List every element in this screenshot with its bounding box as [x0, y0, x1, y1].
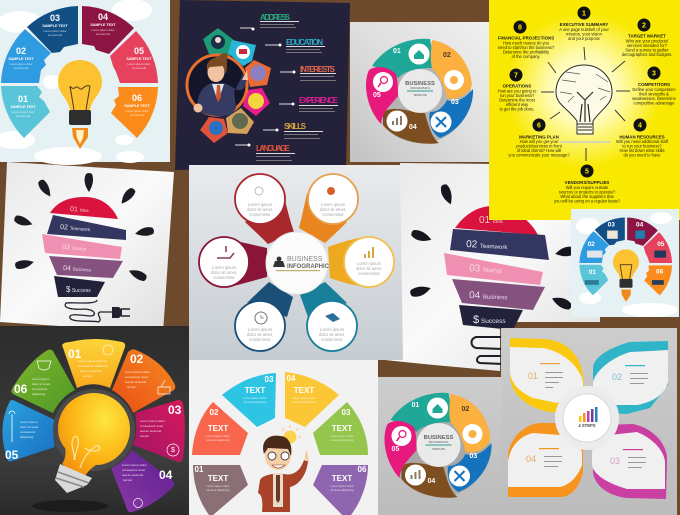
blue segment 03: 03: [470, 453, 477, 460]
petal 01: consectetur adipiscing: [78, 364, 108, 368]
petal 02: consectetur amet: [125, 375, 148, 379]
step 3 competitors: COMPETITORS: [638, 82, 670, 87]
teal segment 01: 01: [412, 402, 419, 409]
petal 04: Lorem ipsum dolor: [122, 463, 147, 467]
band 03 Startup: [444, 253, 543, 285]
panel: small bulb ring (right): [571, 209, 679, 317]
step 2 target market: Send a survey to gather: [625, 48, 669, 52]
petal 04: tempor: [123, 478, 132, 482]
panel: cartoon man ring: [189, 360, 378, 515]
band 03 Startup: 03 Startup: [469, 263, 503, 276]
petal 01: 01: [68, 347, 82, 361]
petal 02: Lorem ipsum dolor: [125, 370, 150, 374]
petal 1 red: [235, 174, 294, 244]
segment 01 mauve: Lorem ipsum dolor: [206, 484, 230, 488]
segment 04 yellow: [285, 372, 339, 427]
segment 01 mauve: sit amet adipiscing: [206, 488, 230, 492]
segment 05: sit amet elit: [132, 66, 146, 70]
label EDUCATION: EDUCATION: [286, 38, 323, 47]
band 01 Idea: [455, 206, 538, 235]
label ADDRESS: [240, 13, 299, 30]
step 8 financial projections: Determine the profitability: [503, 50, 550, 54]
glowing bulb: [53, 389, 135, 493]
segment 02 red: TEXT: [208, 424, 228, 433]
orange segment 02: 02: [462, 406, 469, 413]
petal 01: tempor: [83, 374, 92, 378]
panel: resume navy: [175, 0, 350, 170]
pentagon icons: [200, 28, 271, 143]
segment 03: 03: [50, 13, 60, 23]
petal 05: Lorem ipsum: [20, 420, 38, 424]
petal 01: Lorem ipsum dolor sit: [78, 359, 107, 363]
segment 02: SAMPLE TEXT: [8, 57, 34, 61]
segment 03 cyan: 03: [265, 375, 274, 384]
petal 03: 03: [168, 403, 182, 417]
step 4 human resources: [616, 118, 669, 158]
band Success: $ Success: [66, 285, 91, 294]
petal 5 navy: dolor sit amet,: [247, 332, 273, 337]
petal 04: 04: [159, 468, 173, 482]
panel: six petal flower: [189, 165, 403, 360]
step 5 vendors: What about the suppliers that: [560, 194, 614, 199]
segment 02: [1, 29, 51, 83]
step 4 human resources: 4: [638, 122, 642, 130]
petal 02: [112, 349, 175, 413]
panel: small bulb ring (right): 04: [636, 221, 644, 228]
segment 03 green: TEXT: [332, 424, 352, 433]
step 6 marketing plan: [508, 118, 570, 158]
panel: idea bulb ring (top left): [0, 0, 170, 165]
step 8 financial projections: 8: [518, 24, 522, 32]
petal 06: adipiscing: [32, 392, 46, 396]
panel: small bulb ring (right): 02: [588, 241, 595, 248]
segment 01: SAMPLE TEXT: [10, 105, 36, 109]
step 7 operations: to get the job done.: [499, 106, 535, 112]
pink segment 05: 05: [392, 446, 399, 453]
petal 6 maroon: Lorem ipsum: [212, 265, 236, 270]
segment 02 red: Lorem ipsum dolor: [206, 434, 230, 438]
band 03 Startup: [42, 234, 122, 259]
petal 01: sed do eiusmod: [80, 369, 102, 373]
panel: small bulb ring (right): 03: [608, 221, 615, 228]
band 01 Idea: 01 Idea: [479, 215, 503, 226]
segment 04 yellow: Lorem ipsum dolor: [292, 396, 316, 400]
band 03 Startup: 03 Startup: [62, 244, 87, 253]
petal 03: consectetur amet: [140, 424, 163, 428]
step 4 human resources: How list down what skills: [619, 148, 665, 153]
panel: yellow business plan: [489, 0, 680, 220]
segment 01 mauve: TEXT: [208, 474, 228, 483]
segment 03 cyan: Lorem ipsum dolor: [243, 396, 267, 400]
petal 2 orange: dolor sit amet,: [320, 207, 346, 212]
segment 03: Lorem ipsum dolor: [43, 29, 67, 33]
panel: four steps leaves: [501, 328, 677, 515]
icon: light bulb with flame: [58, 60, 102, 149]
segment 01 mauve: [193, 465, 248, 515]
petal 06: [11, 350, 75, 413]
segment 06: [111, 87, 158, 138]
step 8 financial projections: How much money do you: [503, 40, 549, 46]
segment 06: SAMPLE TEXT: [124, 104, 150, 108]
step 3 competitors: their strengths &: [639, 92, 669, 96]
petal 1 red: consectetur: [249, 212, 271, 217]
petal 5 navy: consectetur: [249, 337, 271, 342]
label LANGUAGE: [235, 144, 295, 161]
step 2 target market: [622, 18, 672, 57]
step 6 marketing plan: you communicate your message?: [508, 152, 570, 158]
step 1 executive summary: and your purpose: [568, 36, 601, 41]
step 4 human resources: to run your business?: [622, 144, 662, 148]
centre disc: [398, 69, 442, 113]
petal 05: [2, 400, 55, 462]
centre disc: TEMPLATE: [432, 447, 446, 451]
centre disc: INFOGRAPHIC: [287, 264, 330, 270]
segment 02: sit amet elit: [14, 66, 28, 70]
step 1 executive summary: [559, 6, 609, 41]
petal 05: consectetur: [20, 430, 36, 434]
petal 06: Lorem ipsum: [32, 377, 50, 381]
band 01 Idea: 01 Idea: [70, 206, 89, 214]
petal 6 maroon: dolor sit amet,: [211, 270, 237, 275]
step 7 operations: OPERATIONS: [503, 84, 531, 88]
step 5 vendors: 5: [585, 168, 589, 176]
label SKILLS: SKILLS: [284, 122, 307, 131]
leaf 03 magenta: [592, 424, 667, 499]
petal 05: dolor sit amet: [20, 425, 38, 429]
panel: small bulb ring (right): 01: [589, 269, 596, 276]
step 1 executive summary: mission, your vision: [566, 32, 603, 36]
cord: [472, 337, 503, 364]
petal 3 yellow: Lorem ipsum: [357, 261, 381, 266]
segment 02: 02: [16, 46, 26, 56]
segment 06 purple: TEXT: [332, 474, 352, 483]
petal 06: dolor sit amet: [32, 382, 50, 386]
petal 02: tempor: [127, 385, 136, 389]
step 3 competitors: weaknesses. Determine: [632, 96, 677, 101]
step 5 vendors: you will be using on a regular basis?: [554, 198, 621, 204]
segment 06 purple: [313, 465, 368, 515]
petal 04: consectetur amet: [122, 468, 145, 472]
segment 03: [27, 6, 78, 53]
step 5 vendors: [554, 164, 621, 204]
rays: [13, 173, 155, 282]
segment 06: sit amet elit: [130, 113, 144, 117]
segment 05: 05: [134, 46, 144, 56]
segment 02 red: 02: [210, 408, 219, 417]
band 04 Business: [49, 256, 123, 278]
petal 3 yellow: dolor sit amet,: [356, 266, 382, 271]
panel: business pie (top): [350, 22, 489, 162]
segment 03 cyan: TEXT: [245, 386, 265, 395]
segment 04: SAMPLE TEXT: [90, 23, 116, 27]
petal 2 orange: [299, 174, 358, 243]
cartoon man with idea bulb: [258, 425, 309, 512]
step 2 target market: demographics and budgets.: [622, 52, 672, 57]
step 8 financial projections: FINANCIAL PROJECTIONS: [498, 36, 554, 40]
step 6 marketing plan: of ideal clients? How will: [517, 148, 561, 153]
step 1 executive summary: EXECUTIVE SUMMARY: [560, 22, 608, 27]
step 7 operations: [498, 68, 537, 112]
petal 03: sed do eiusmod: [140, 429, 162, 433]
centre disc: TEMPLATE: [413, 93, 427, 97]
segment 01: Lorem ipsum dolor: [11, 110, 35, 114]
leaf 04 orange: 04: [526, 454, 536, 464]
petal 3 yellow: [328, 237, 394, 287]
centre disc: INFOGRAPHICS: [410, 86, 430, 90]
petal 04: [111, 450, 174, 512]
teal segment 01: 01: [393, 48, 401, 55]
blue segment 03: 03: [451, 99, 459, 106]
segment 06 purple: 06: [358, 465, 367, 474]
brown segment 04: 04: [428, 478, 435, 485]
petal 03: Lorem ipsum dolor: [140, 419, 165, 423]
label SKILLS: [263, 122, 323, 139]
panel: business pie (bottom): [378, 360, 501, 515]
step 2 target market: TARGET MARKET: [628, 34, 666, 38]
orange ring: [187, 55, 247, 115]
segment 01: [1, 86, 50, 138]
band 04 Business: 04 Business: [469, 290, 508, 302]
band 02 Teamwork: [450, 229, 549, 260]
segment 06: Lorem ipsum dolor: [125, 109, 149, 113]
petal 4 teal: consectetur: [321, 337, 343, 342]
step 7 operations: run your business?: [500, 93, 535, 98]
segment 04 yellow: sit amet adipiscing: [292, 400, 316, 404]
segment 03 green: 03: [342, 408, 351, 417]
centre disc: INFOGRAPHICS: [429, 440, 449, 444]
segment 05: SAMPLE TEXT: [126, 57, 152, 61]
icon: sketched brain bulb: [541, 47, 630, 161]
segment 03: SAMPLE TEXT: [42, 24, 68, 28]
step 7 operations: Determine the most: [499, 98, 536, 102]
band Success: [459, 305, 523, 330]
segment 04 yellow: TEXT: [294, 386, 314, 395]
segment 01 mauve: 01: [195, 465, 204, 474]
centre disc: [266, 232, 330, 294]
petal 03: [133, 400, 185, 462]
label INTERESTS: INTERESTS: [300, 65, 336, 74]
label EXPERIENCE: [279, 96, 339, 112]
segment 03 green: sit amet adipiscing: [330, 438, 354, 442]
petal 2 orange: consectetur: [322, 212, 344, 217]
petal 6 maroon: consectetur: [213, 275, 235, 280]
petal 4 teal: [300, 282, 357, 351]
centre ring with bar chart: [555, 386, 619, 450]
band 02 Teamwork: 02 Teamwork: [60, 224, 91, 233]
step 4 human resources: Will you need additional staff: [616, 139, 669, 144]
label EDUCATION: [265, 38, 325, 53]
petal 02: sed do eiusmod: [125, 380, 147, 384]
petal 6 maroon: [199, 237, 267, 287]
segment 06: 06: [132, 93, 142, 103]
panel: small bulb ring (right): 05: [657, 241, 665, 248]
segment 04: Lorem ipsum dolor: [91, 28, 115, 32]
segment 03 cyan: [222, 373, 276, 427]
segment 02 red: [192, 402, 248, 455]
leaf 02 cyan: 02: [612, 372, 622, 382]
petal 5 navy: Lorem ipsum: [248, 327, 272, 332]
petal 06: 06: [14, 382, 28, 396]
panel: small bulb ring (right): 06: [656, 269, 664, 276]
step 6 marketing plan: How will you get your: [520, 139, 559, 144]
step 6 marketing plan: 6: [537, 122, 541, 130]
step 1 executive summary: 1: [582, 10, 586, 18]
segment 04: 04: [98, 12, 108, 22]
step 8 financial projections: [498, 20, 555, 59]
leaf 02 cyan: [593, 341, 668, 414]
segment 03 green: Lorem ipsum dolor: [330, 434, 354, 438]
band 02 Teamwork: [47, 215, 126, 240]
leaf 01 yellow: [510, 338, 584, 413]
segment 04 yellow: 04: [287, 374, 296, 383]
pink segment 05: 05: [373, 92, 381, 99]
step 2 target market: services intended for?: [627, 43, 668, 48]
step 3 competitors: [632, 66, 677, 106]
segment 06 purple: sit amet adipiscing: [330, 488, 354, 492]
step 2 target market: 2: [642, 22, 646, 30]
segment 03 green: [313, 402, 368, 455]
petal 03: tempor: [140, 434, 149, 438]
petal 1 red: dolor sit amet,: [247, 207, 273, 212]
step 4 human resources: do you need to have: [623, 152, 661, 158]
band 02 Teamwork: 02 Teamwork: [466, 239, 509, 252]
leaf 04 orange: [508, 423, 583, 497]
segment 04: sit amet elit: [96, 32, 110, 36]
segment 02 red: sit amet adipiscing: [206, 438, 230, 442]
step 7 operations: How are you going to: [498, 88, 537, 94]
petal 04: sed do eiusmod: [122, 473, 144, 477]
segment 04: [82, 6, 134, 54]
segment 01: sit amet elit: [16, 114, 30, 118]
label ADDRESS: ADDRESS: [260, 13, 291, 22]
rays: [409, 183, 577, 311]
step 3 competitors: competitive advantage: [634, 100, 675, 106]
step 5 vendors: sources or projects to operate?: [559, 190, 616, 194]
step 5 vendors: Will you require outside: [566, 185, 609, 190]
petal 05: 05: [5, 448, 19, 462]
step 3 competitors: Define your competitors: [632, 87, 676, 92]
petal 5 navy: [235, 282, 293, 351]
step 8 financial projections: need to start/run the business?: [498, 45, 555, 50]
brown segment 04: 04: [409, 124, 417, 131]
centre disc: BUSINESS: [424, 435, 453, 441]
petal 4 teal: dolor sit amet,: [319, 332, 345, 337]
segment 02: Lorem ipsum dolor: [9, 62, 33, 66]
band Success: [54, 276, 105, 297]
petal 01: [62, 339, 125, 388]
step 4 human resources: HUMAN RESOURCES: [619, 134, 665, 140]
step 1 executive summary: A one page nutshell of your: [559, 27, 609, 32]
label INTERESTS: [280, 65, 336, 81]
orange segment 02: 02: [443, 52, 451, 59]
centre disc: BUSINESS: [287, 256, 323, 263]
segment 06 purple: Lorem ipsum dolor: [330, 484, 354, 488]
label EXPERIENCE: EXPERIENCE: [299, 96, 339, 105]
label LANGUAGE: LANGUAGE: [256, 144, 291, 153]
step 5 vendors: VENDORS/SUPPLIES: [565, 180, 609, 185]
step 8 financial projections: of the company.: [512, 54, 541, 59]
panel: bulb stripes paper (right, large): [385, 163, 600, 372]
icon: cord and plug: [65, 300, 130, 322]
band 01 Idea: [50, 197, 118, 219]
step 6 marketing plan: MARKETING PLAN: [519, 134, 559, 140]
centre disc: BUSINESS: [405, 81, 435, 87]
segment 01: 01: [18, 94, 28, 104]
band 04 Business: 04 Business: [63, 265, 92, 274]
centre disc: [416, 423, 460, 467]
centre ring with bar chart: 4 STEPS: [578, 423, 596, 428]
businessman: [194, 53, 248, 116]
step 7 operations: 7: [514, 72, 518, 80]
petal 03: $: [171, 447, 175, 454]
step 6 marketing plan: products/services in front: [516, 144, 563, 148]
panel: bulb stripes paper (left): [0, 162, 174, 333]
band 04 Business: [452, 279, 545, 310]
leaf 03 magenta: 03: [610, 456, 620, 466]
petal 05: adipiscing: [20, 435, 34, 439]
petal 1 red: Lorem ipsum: [248, 202, 272, 207]
segment 05: [110, 31, 158, 83]
step 2 target market: Who are your products/: [626, 38, 669, 44]
segment 05: Lorem ipsum dolor: [127, 62, 151, 66]
step 3 competitors: 3: [652, 70, 656, 78]
petal 06: consectetur: [32, 387, 48, 391]
petal 02: 02: [130, 352, 144, 366]
petal 4 teal: Lorem ipsum: [320, 327, 344, 332]
band Success: $ Success: [473, 314, 506, 326]
petal 3 yellow: consectetur: [358, 271, 380, 276]
petal 2 orange: Lorem ipsum: [321, 202, 345, 207]
segment 03: sit amet elit: [48, 33, 62, 37]
segment 03 cyan: sit amet adipiscing: [243, 400, 267, 404]
panel: dark bulb petals: [0, 326, 189, 515]
step 7 operations: efficient way: [506, 102, 529, 107]
leaf 01 yellow: 01: [528, 371, 538, 381]
